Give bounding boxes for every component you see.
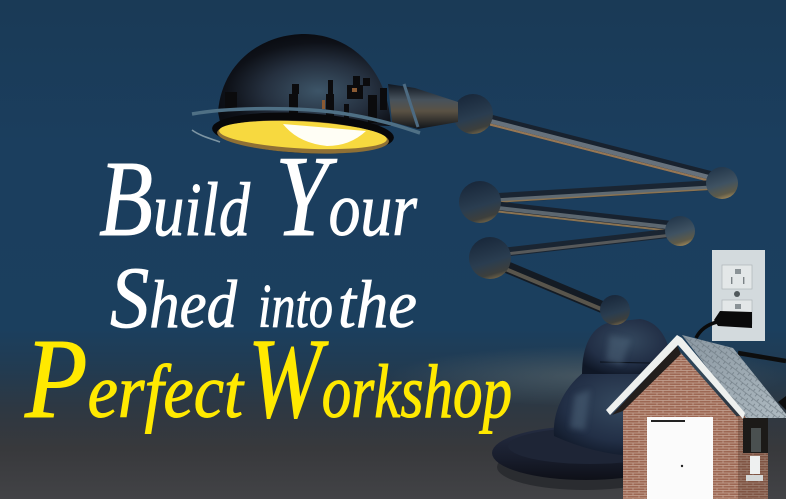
shade flange xyxy=(192,109,420,133)
lamp neck xyxy=(388,84,458,129)
joint: left middle ball xyxy=(459,181,501,223)
title line 3 xyxy=(24,315,512,442)
joint: right ball xyxy=(706,167,738,199)
shed window xyxy=(746,428,763,481)
lamp shade xyxy=(192,34,420,158)
arm: fourth arm xyxy=(506,233,672,254)
outlet upper socket xyxy=(722,265,752,289)
title line 2: into xyxy=(258,273,333,341)
arm: third arm xyxy=(498,207,676,232)
title line 2: Shed xyxy=(110,250,238,347)
lens: yellow light xyxy=(218,117,388,153)
lower bell xyxy=(554,370,690,456)
shed door xyxy=(647,417,713,499)
shed side wall xyxy=(737,416,768,499)
shed eave shadow xyxy=(612,345,681,415)
title line 2: the xyxy=(338,266,417,342)
lamp arms and joints xyxy=(453,94,738,314)
title line 3: Workshop xyxy=(248,315,512,442)
base disc xyxy=(492,426,680,480)
title xyxy=(24,133,512,442)
shade dome xyxy=(218,34,391,126)
plug and cord xyxy=(696,311,786,410)
shade rust marks xyxy=(225,76,387,123)
lens: white hot spot xyxy=(283,124,366,146)
arm: lower arm xyxy=(503,266,614,314)
shed white trim xyxy=(606,335,745,419)
title line 2 xyxy=(110,250,417,347)
bell marbling xyxy=(570,335,630,430)
title line 1: Your xyxy=(275,133,417,260)
title line 3: Perfect xyxy=(24,315,245,442)
outlet plate xyxy=(712,250,765,341)
lens: black rim xyxy=(211,108,395,158)
wall outlet xyxy=(696,250,786,410)
joint: top ball xyxy=(453,94,493,134)
outlet lower socket xyxy=(722,300,752,324)
shed front wall xyxy=(623,352,738,499)
title line 1: Build xyxy=(99,140,251,259)
arm: top long arm xyxy=(490,120,716,182)
joint: base ball xyxy=(600,295,630,325)
lens: bronze edge xyxy=(216,117,390,157)
shed roof xyxy=(682,335,786,418)
shed xyxy=(606,335,786,499)
upper bell xyxy=(582,319,672,374)
arm: second arm xyxy=(498,185,715,202)
lamp base xyxy=(492,295,690,490)
joint: right small ball xyxy=(665,216,695,246)
joint: left lower ball xyxy=(469,237,511,279)
title line 1 xyxy=(99,133,417,260)
